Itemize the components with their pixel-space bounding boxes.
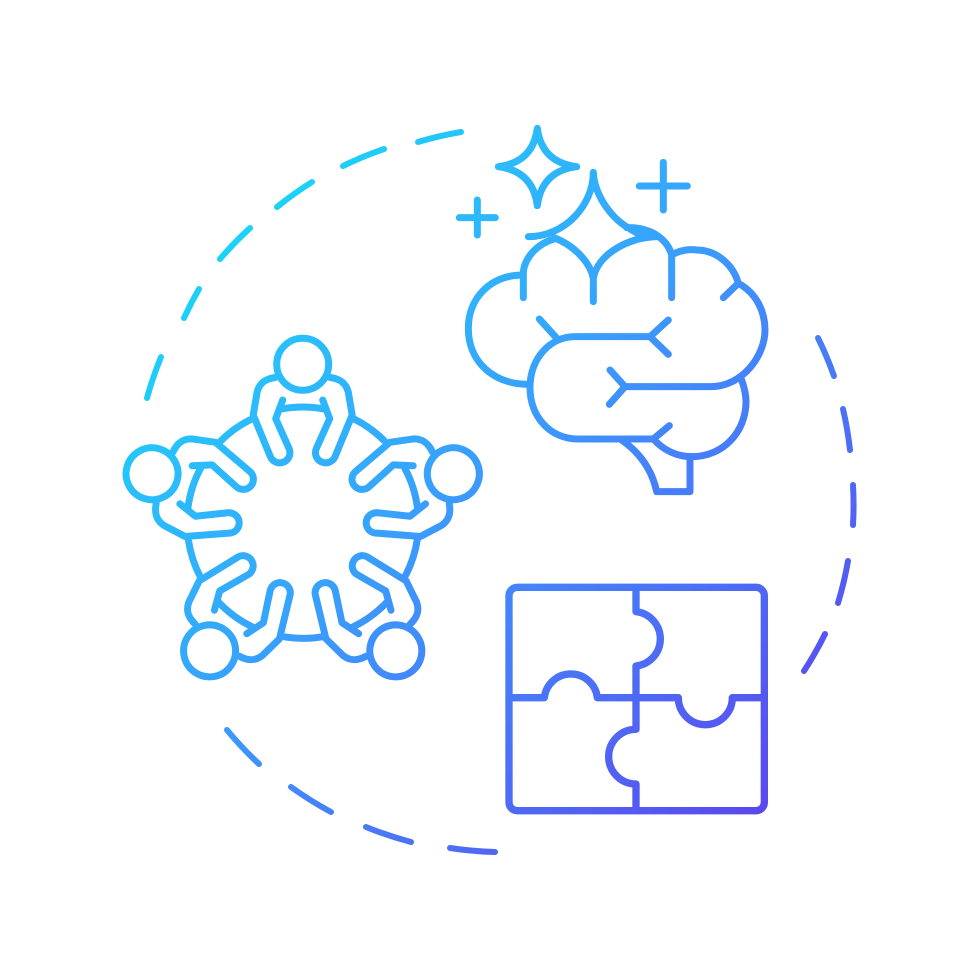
brain stem bbox=[622, 440, 690, 492]
puzzle horizontal seam bbox=[509, 674, 764, 725]
person: left bbox=[112, 388, 271, 551]
dashed circle ring bbox=[147, 132, 854, 852]
puzzle frame bbox=[509, 587, 764, 811]
icon: large sparkle on brain bbox=[528, 172, 658, 302]
person: bottom left bbox=[128, 523, 308, 701]
person: bottom right bbox=[272, 542, 451, 720]
icon: four-piece jigsaw puzzle bbox=[509, 587, 764, 811]
icon: circle of five people bbox=[112, 338, 503, 720]
person: right bbox=[344, 419, 503, 582]
person: top bbox=[253, 338, 384, 463]
brain outline bbox=[468, 228, 765, 457]
icon: small sparkle bbox=[498, 128, 577, 206]
icon: large plus bbox=[639, 162, 687, 210]
icon: small plus bbox=[459, 200, 495, 235]
puzzle vertical seam bbox=[609, 587, 660, 811]
icon: brain with sparkles bbox=[459, 128, 765, 492]
